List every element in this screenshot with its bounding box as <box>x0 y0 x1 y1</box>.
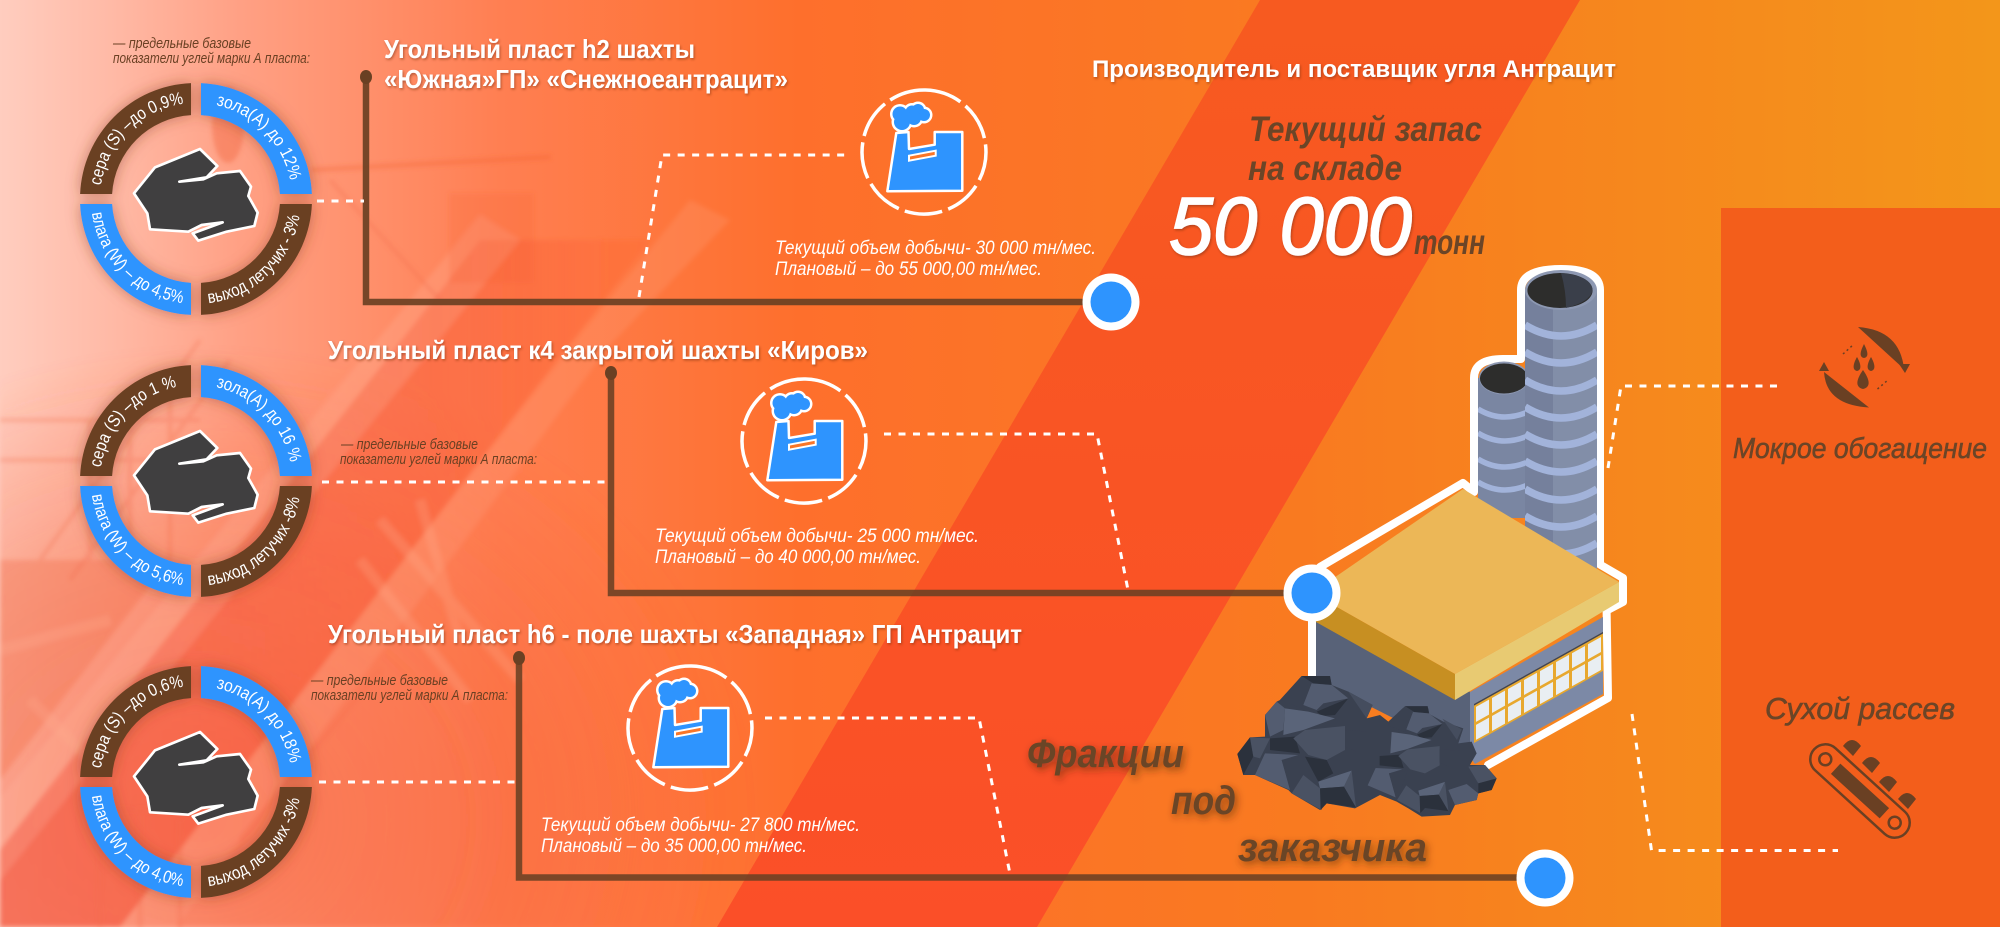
note 1: показатели углей марки А пласта: <box>113 50 310 67</box>
text: fractions: под <box>1171 779 1236 823</box>
stock block: 50 000 <box>1169 181 1412 272</box>
donut 2: влага (W) – до 5,6% <box>92 494 183 585</box>
connector line 2 <box>605 366 1290 593</box>
left cluster <box>1237 676 1373 810</box>
note 2 <box>340 436 537 468</box>
title: seam h2: «Южная»ГП» «Снежноеантрацит» <box>384 64 788 94</box>
connector line 1 <box>360 70 1090 302</box>
text: output 3 <box>541 815 860 857</box>
small chimney <box>1478 362 1525 518</box>
note 3: показатели углей марки А пласта: <box>311 687 508 704</box>
donut 3: зола(А) до 18% <box>216 680 302 762</box>
factory outline <box>1312 269 1623 765</box>
donut 2: зола(А) до 16 % <box>216 378 302 462</box>
windows <box>1474 632 1603 743</box>
title: seam h6: Угольный пласт h6 - поле шахты «Западная» ГП Антрацит <box>328 619 1022 649</box>
stock block: на складе <box>1248 149 1402 188</box>
donut 2: выход летучих -8% <box>208 498 300 586</box>
note 1: — предельные базовые <box>112 35 251 52</box>
stock block: Текущий запас <box>1249 110 1482 149</box>
icon: dry screening conveyor <box>1804 738 1916 844</box>
donut 1: сера (S) –до 0,9% <box>92 92 183 184</box>
donut 3: выход летучих -3% <box>208 798 300 886</box>
icon: coal lump <box>134 431 258 523</box>
text: fractions: заказчика <box>1238 826 1427 870</box>
text: output 1 <box>775 238 1096 280</box>
right wall <box>1470 617 1603 764</box>
icon: factory 2 <box>742 379 866 503</box>
donut 1: выход летучих - 3% <box>208 216 300 304</box>
icon: factory 1 <box>862 90 986 214</box>
stock block <box>1169 110 1485 272</box>
title: seam h2: Угольный пласт h2 шахты <box>384 34 695 64</box>
right cluster <box>1368 706 1462 813</box>
icon: coal lump <box>134 149 258 241</box>
dotted links <box>317 155 1838 874</box>
text: output 3: Текущий объем добычи- 27 800 тн/мес. <box>541 815 860 836</box>
text: output 1: Текущий объем добычи- 30 000 тн/мес. <box>775 238 1096 259</box>
coal pile <box>1237 676 1497 817</box>
label: dry screening: Сухой рассев <box>1765 691 1955 726</box>
donut 3: влага (W) – до 4,0% <box>92 796 183 886</box>
text: output 3: Плановый – до 35 000,00 тн/мес. <box>541 836 807 857</box>
roof <box>1312 489 1619 700</box>
background photo: conveyor <box>0 87 780 927</box>
icon: wet processing <box>1819 327 1910 408</box>
title: seam k4: Угольный пласт к4 закрытой шахты «Киров» <box>328 335 868 365</box>
donut 1: зола(А) до 12% <box>216 96 302 180</box>
note 2: — предельные базовые <box>340 436 478 453</box>
text: output 2 <box>655 526 979 568</box>
stock block: тонн <box>1414 223 1485 262</box>
text: output 2: Текущий объем добычи- 25 000 тн/мес. <box>655 526 979 547</box>
note 3 <box>310 672 508 704</box>
factory building <box>1312 269 1623 765</box>
donut 1 <box>72 76 320 322</box>
tall chimney <box>1525 270 1597 580</box>
donut 2 <box>73 358 318 603</box>
text: output 1: Плановый – до 55 000,00 тн/мес. <box>775 259 1042 280</box>
icon: factory 3 <box>628 666 752 790</box>
text: fractions: Фракции <box>1027 732 1184 776</box>
icon: coal lump <box>134 732 258 824</box>
donut 3: сера (S) –до 0,6% <box>92 675 183 768</box>
donut 2: сера (S) –до 1 % <box>92 376 176 466</box>
text: fractions <box>1027 732 1427 870</box>
title: seam h2 <box>384 34 788 94</box>
right panel <box>1721 208 2000 927</box>
node circle 3 <box>1516 850 1574 906</box>
node circle 2 <box>1284 564 1340 622</box>
note 3: — предельные базовые <box>310 672 448 689</box>
donut 3 <box>74 660 318 904</box>
left wall <box>1316 610 1470 757</box>
note 2: показатели углей марки А пласта: <box>340 451 537 468</box>
note 1 <box>112 35 310 67</box>
connector line 3 <box>513 651 1525 878</box>
donut 1: влага (W) – до 4,5% <box>92 212 183 303</box>
heading: producer: Производитель и поставщик угля Антрацит <box>1092 56 1616 83</box>
node circle 1 <box>1082 274 1140 330</box>
diagonal band <box>717 0 1580 927</box>
text: output 2: Плановый – до 40 000,00 тн/мес. <box>655 547 921 568</box>
